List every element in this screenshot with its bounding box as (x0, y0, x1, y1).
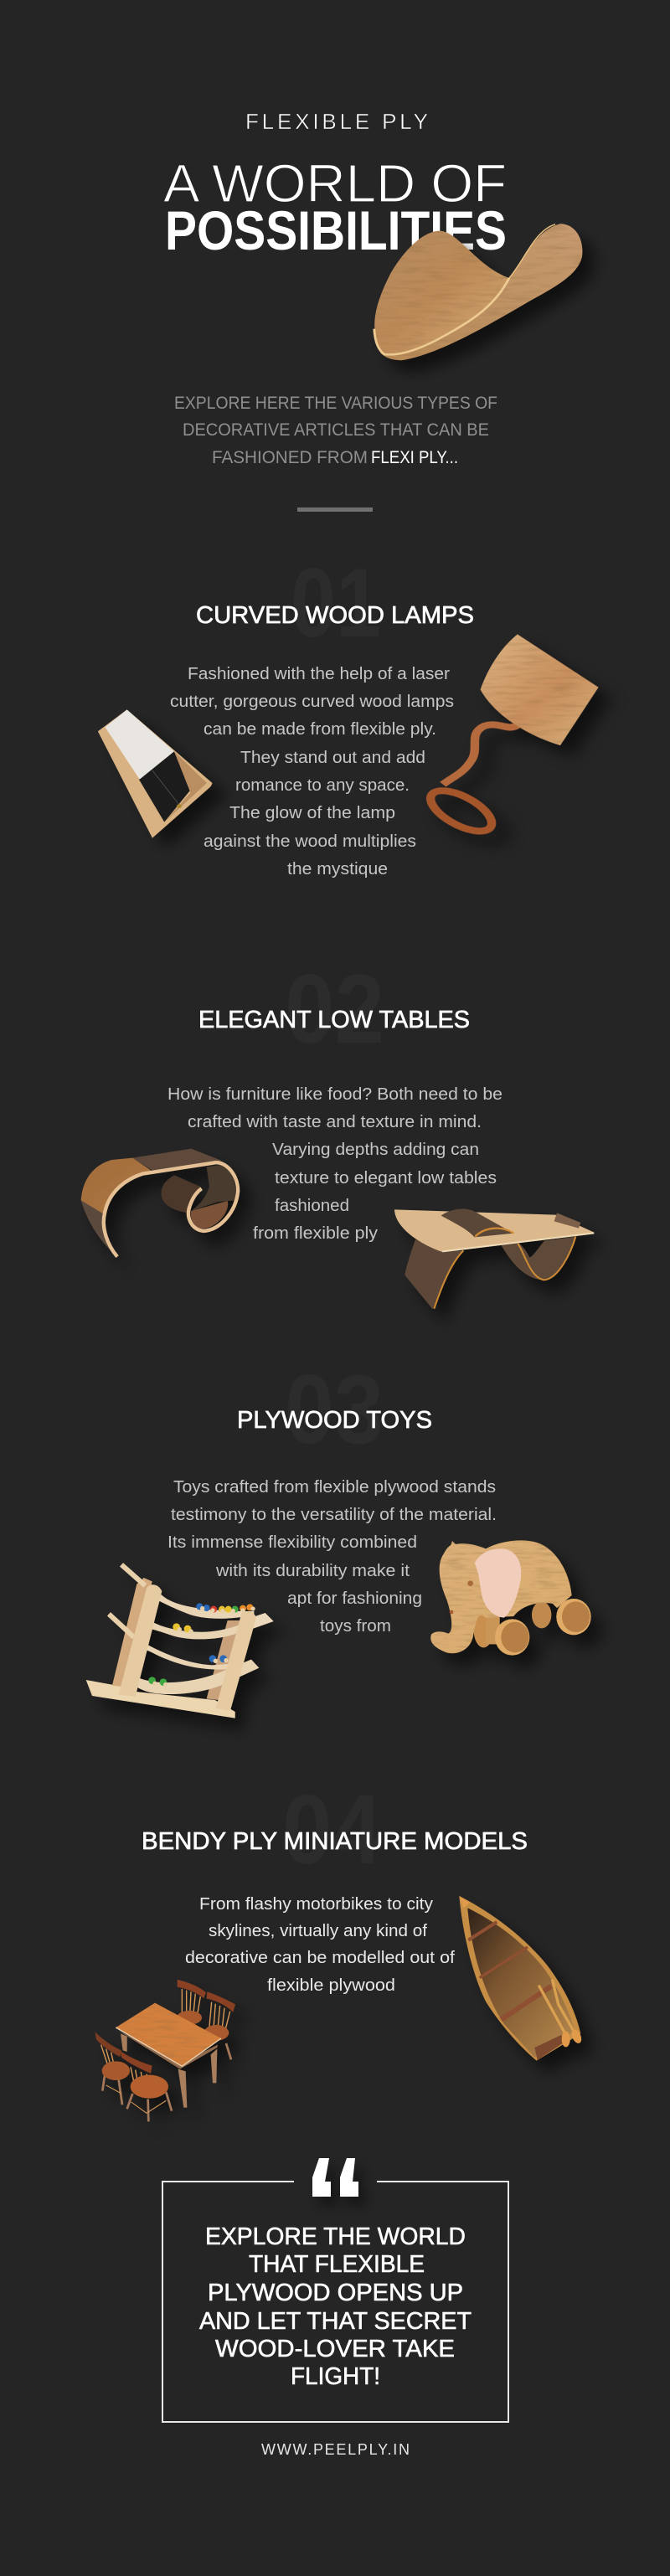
quote frame (162, 2182, 508, 2422)
image: wooden elephant toy (430, 1540, 591, 1656)
intro text: FASHIONED FROM (212, 448, 368, 467)
image: scroll table (81, 1149, 238, 1258)
body text: Its immense flexibility combined (168, 1533, 417, 1552)
website url: WWW.PEELPLY.IN (261, 2441, 410, 2458)
image: miniature canoe (459, 1896, 584, 2061)
body text: skylines, virtually any kind of (209, 1922, 427, 1940)
image: marble ramp toy (86, 1564, 274, 1718)
title: POSSIBILITIES (165, 199, 507, 261)
body text: texture to elegant low tables (275, 1169, 497, 1188)
heading: curved wood lamps: CURVED WOOD LAMPS (196, 602, 474, 629)
intro text: DECORATIVE ARTICLES THAT CAN BE (183, 420, 489, 440)
quote text: AND LET THAT SECRET (199, 2308, 472, 2335)
body text (168, 1085, 502, 1243)
quote text: WOOD-LOVER TAKE (215, 2336, 455, 2362)
panel: elegant low tables (81, 954, 594, 1309)
body text: apt for fashioning (287, 1589, 422, 1608)
body text (168, 1478, 497, 1636)
panel: plywood toys (86, 1354, 591, 1718)
panel: curved wood lamps (98, 548, 599, 878)
body text: flexible plywood (267, 1976, 395, 1995)
section number 02: 02 (285, 954, 384, 1064)
heading: plywood toys: PLYWOOD TOYS (237, 1407, 432, 1434)
quote text (199, 2223, 472, 2390)
section number 01: 01 (291, 548, 381, 657)
body text: They stand out and add (240, 749, 425, 767)
body text (185, 1895, 455, 1995)
image: wave leg table (394, 1209, 594, 1309)
body text: romance to any space. (235, 776, 410, 795)
body text: toys from (320, 1617, 391, 1636)
body text: From flashy motorbikes to city (199, 1895, 433, 1914)
body text: testimony to the versatility of the material. (171, 1506, 497, 1524)
body text: from flexible ply (253, 1224, 378, 1243)
body text: with its durability make it (215, 1562, 410, 1580)
body text: Varying depths adding can (272, 1141, 479, 1159)
body text: The glow of the lamp (229, 804, 395, 822)
body text: against the wood multiplies (204, 832, 416, 851)
heading: elegant low tables: ELEGANT LOW TABLES (198, 1007, 470, 1033)
intro text (174, 394, 497, 467)
panel: closing quote box (162, 2158, 508, 2422)
quote text: PLYWOOD OPENS UP (208, 2280, 463, 2306)
body text: cutter, gorgeous curved wood lamps (170, 693, 454, 711)
body text: fashioned (275, 1197, 349, 1215)
divider bar (297, 507, 373, 512)
section number 03: 03 (285, 1354, 384, 1464)
heading: bendy ply miniature models: BENDY PLY MINIATURE MODELS (142, 1828, 528, 1855)
quote text: THAT FLEXIBLE (249, 2251, 425, 2278)
body text: the mystique (287, 860, 388, 878)
title: A WORLD OF (163, 153, 507, 214)
quote text: EXPLORE THE WORLD (205, 2223, 466, 2250)
intro text: FLEXI PLY... (371, 448, 458, 467)
image: curved stem table lamp (422, 634, 599, 838)
icon: quotation mark (312, 2158, 358, 2197)
image: wedge wall lamp (98, 709, 212, 838)
body text: Fashioned with the help of a laser (188, 665, 450, 683)
image: curved plywood sheet (374, 224, 582, 360)
body text: crafted with taste and texture in mind. (188, 1113, 482, 1131)
section number 04: 04 (282, 1775, 382, 1884)
body text: decorative can be modelled out of (185, 1949, 455, 1967)
body text: Toys crafted from flexible plywood stands (173, 1478, 496, 1497)
quote text: FLIGHT! (291, 2363, 380, 2390)
image: miniature dining set (95, 1980, 235, 2121)
intro text: EXPLORE HERE THE VARIOUS TYPES OF (174, 394, 497, 413)
title (163, 153, 507, 261)
panel: bendy ply miniature models (95, 1775, 584, 2121)
body text (170, 665, 454, 878)
body text: How is furniture like food? Both need to be (168, 1085, 502, 1104)
eyebrow: flexible ply: FLEXIBLE PLY (245, 109, 428, 134)
body text: can be made from flexible ply. (204, 720, 436, 739)
